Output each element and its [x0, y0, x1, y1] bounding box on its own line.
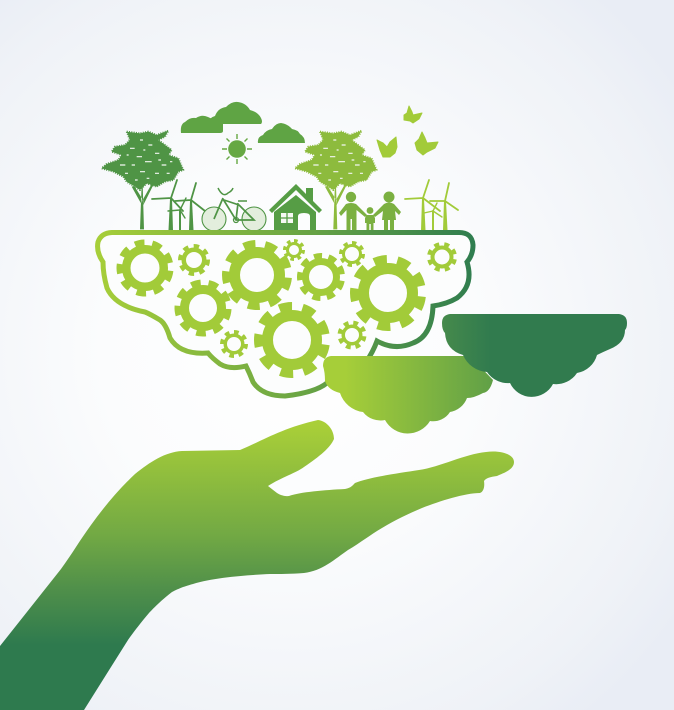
gear 1 [116, 239, 174, 297]
cloud: left [181, 116, 223, 133]
icon: sun [222, 134, 252, 164]
gear 7 [351, 256, 425, 330]
cloud outline panel with gears [98, 232, 473, 396]
icon: butterfly left [377, 137, 397, 157]
icon: butterfly top [404, 106, 422, 123]
gear 4 [285, 241, 303, 259]
cloud outline [98, 232, 473, 396]
icon: right wind turbines [405, 180, 458, 230]
gear 11 [222, 332, 246, 356]
gear 9 [176, 281, 230, 335]
gear 2 [180, 246, 208, 274]
icon: butterfly right [415, 132, 438, 155]
icon: family [339, 192, 401, 230]
gear 3 [223, 241, 291, 309]
gear 10 [254, 302, 330, 378]
cloud: right [258, 123, 305, 143]
light green cloud [323, 356, 493, 433]
gear 5 [296, 252, 346, 302]
gear 8 [427, 242, 457, 272]
hand [0, 420, 514, 710]
icon: left wind turbines [152, 180, 205, 230]
gear 12 [339, 322, 365, 348]
icon: house [269, 184, 322, 230]
cloud: middle [209, 102, 262, 124]
gear 6 [341, 243, 363, 265]
icon: left tree [102, 131, 183, 229]
icon: right tree [295, 131, 377, 229]
icon: bicycle [202, 188, 266, 231]
scene: eco landscape [102, 102, 458, 231]
dark green cloud [442, 314, 627, 397]
